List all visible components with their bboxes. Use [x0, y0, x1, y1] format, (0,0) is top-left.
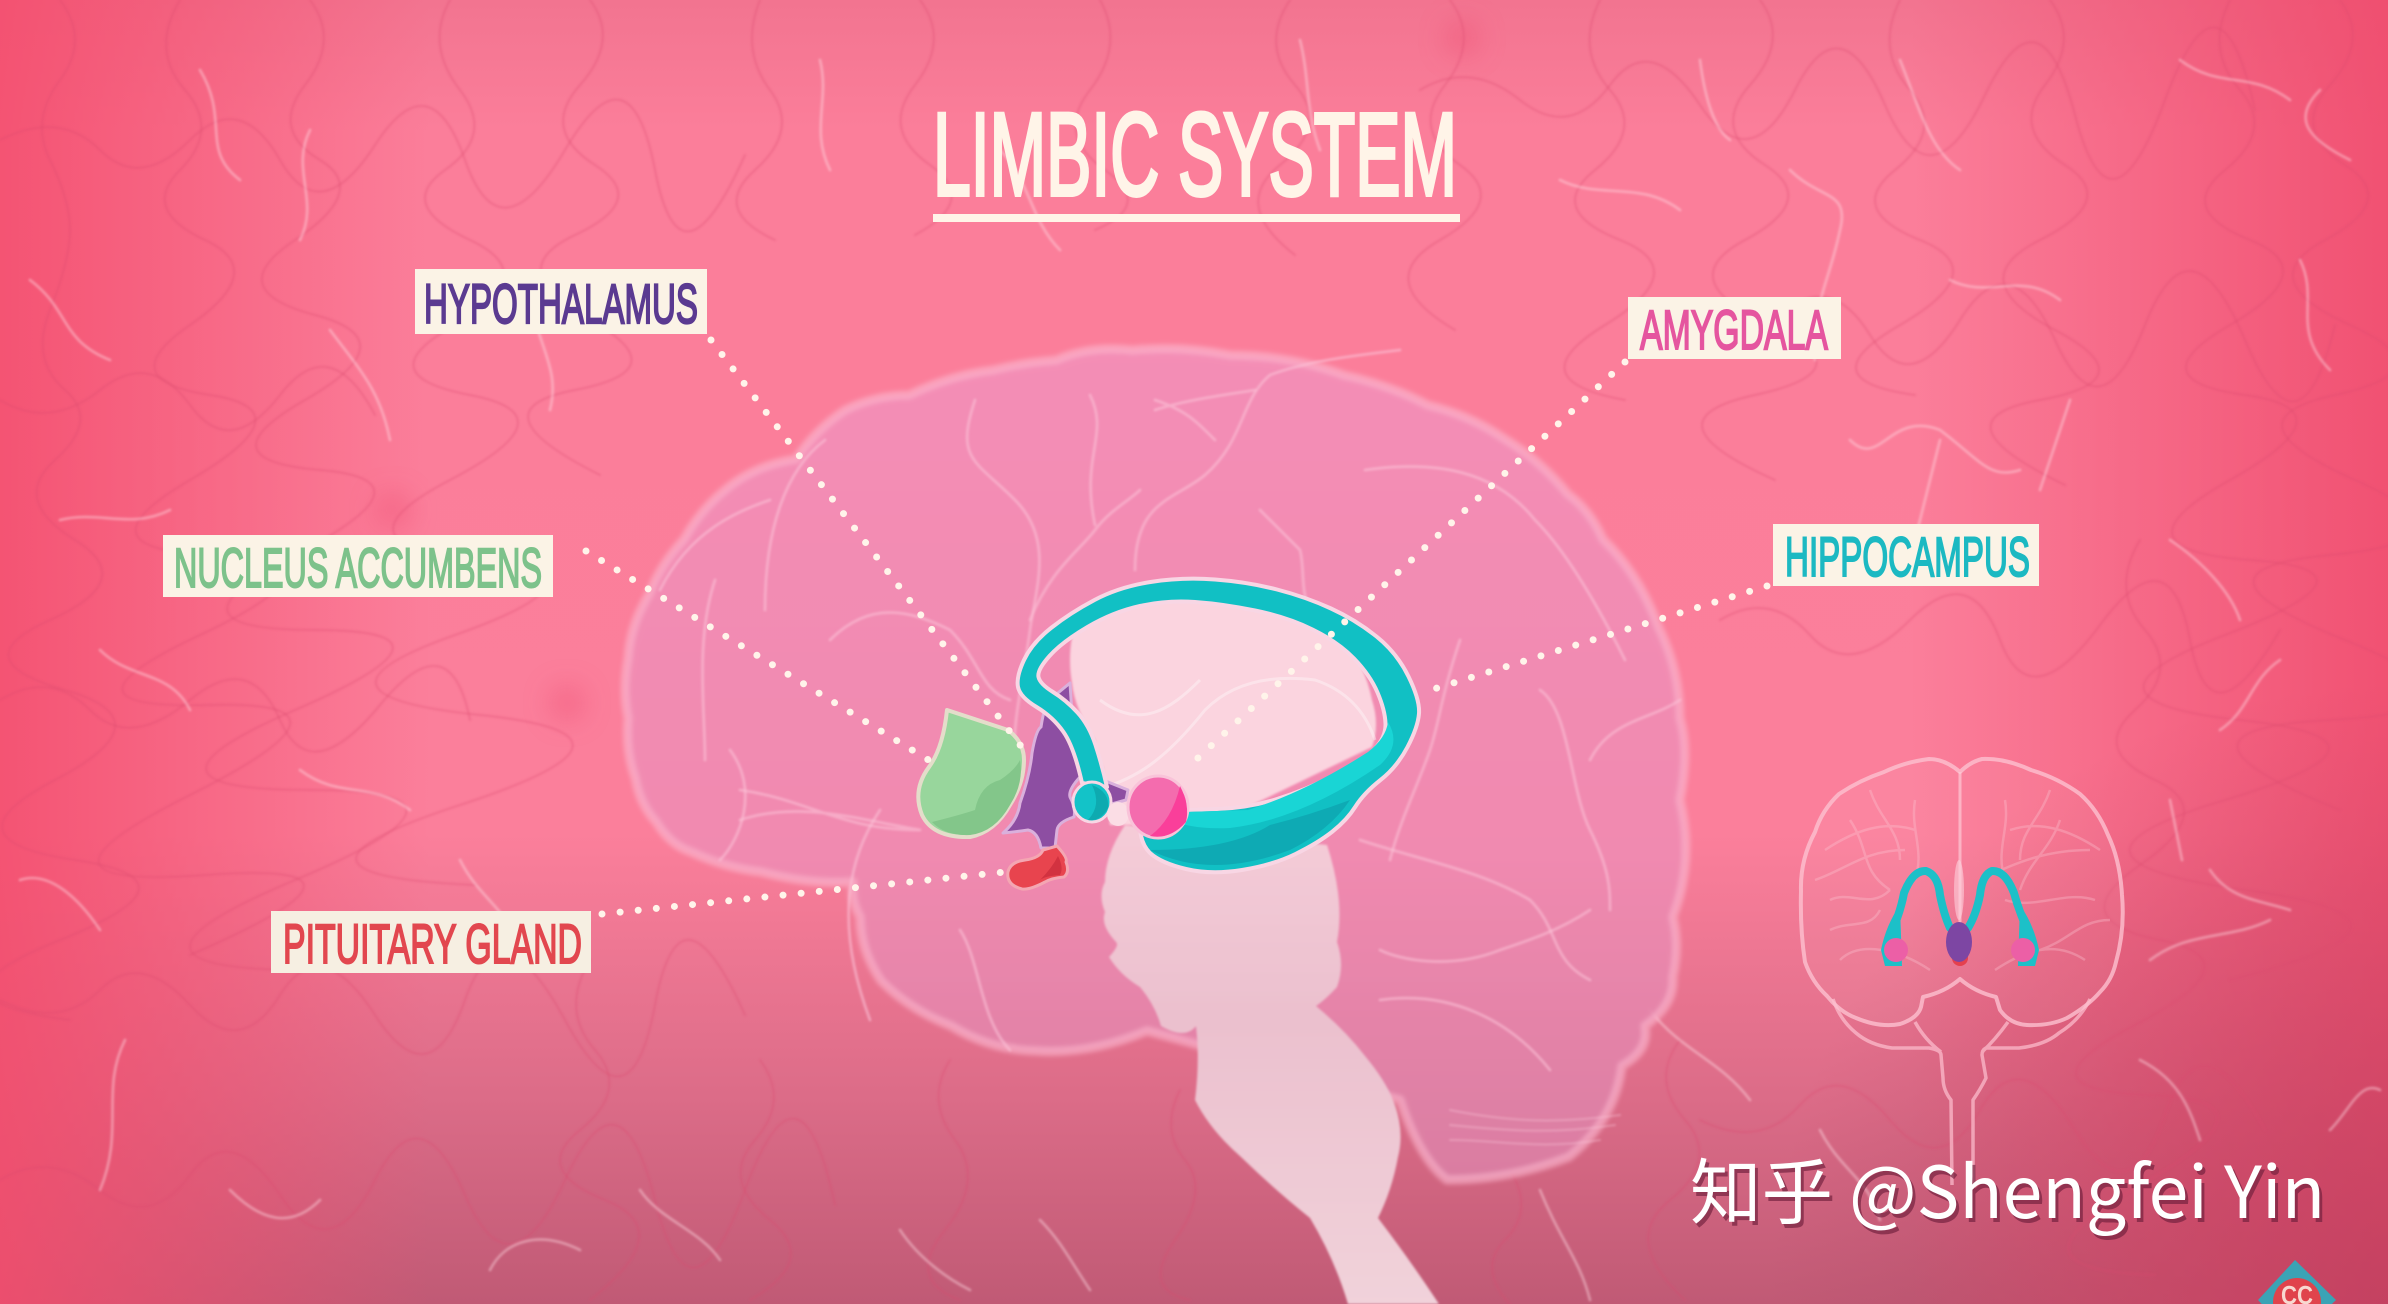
dotted leader: amygdala — [1185, 362, 1625, 770]
hippocampus shading — [1165, 722, 1393, 828]
label: hypothalamus — [415, 269, 707, 335]
hippocampus and fornix — [1018, 579, 1419, 872]
label: nucleus accumbens: NUCLEUS ACCUMBENS — [174, 536, 542, 599]
main brain — [625, 348, 1686, 1180]
central pale structure — [1070, 597, 1376, 825]
crash course logo — [2258, 1260, 2336, 1304]
fornix bulb — [1073, 782, 1111, 822]
label: hypothalamus: HYPOTHALAMUS — [424, 272, 698, 335]
nucleus accumbens shape — [918, 710, 1024, 837]
label: amygdala: AMYGDALA — [1640, 298, 1828, 361]
label: pituitary gland: PITUITARY GLAND — [283, 912, 582, 975]
title — [933, 89, 1460, 222]
small brain folds — [1815, 790, 2110, 970]
pale small node — [1107, 802, 1129, 826]
pituitary gland shape — [1008, 846, 1068, 889]
label: hippocampus: HIPPOCAMPUS — [1785, 525, 2030, 588]
hypothalamus shape — [1003, 683, 1128, 848]
central folds — [1095, 678, 1375, 790]
dotted leader: hippocampus — [1421, 586, 1767, 693]
dotted leader: pituitary gland — [602, 871, 1015, 914]
title: LIMBIC SYSTEM — [933, 89, 1457, 221]
background blotches — [377, 22, 1478, 719]
watermark: 知乎 @Shengfei Yin — [1690, 1135, 2325, 1239]
dotted leader: hypothalamus — [711, 340, 1030, 758]
label: nucleus accumbens — [163, 535, 553, 599]
brain stem — [1102, 825, 1439, 1304]
brain fold lines — [660, 350, 1680, 1144]
dotted leader: nucleus accumbens — [586, 551, 940, 767]
amygdala shape — [1128, 776, 1188, 838]
label: hippocampus — [1773, 524, 2039, 588]
label: pituitary gland — [271, 911, 591, 975]
label: amygdala — [1628, 297, 1841, 361]
small front-view brain — [1801, 759, 2123, 1185]
